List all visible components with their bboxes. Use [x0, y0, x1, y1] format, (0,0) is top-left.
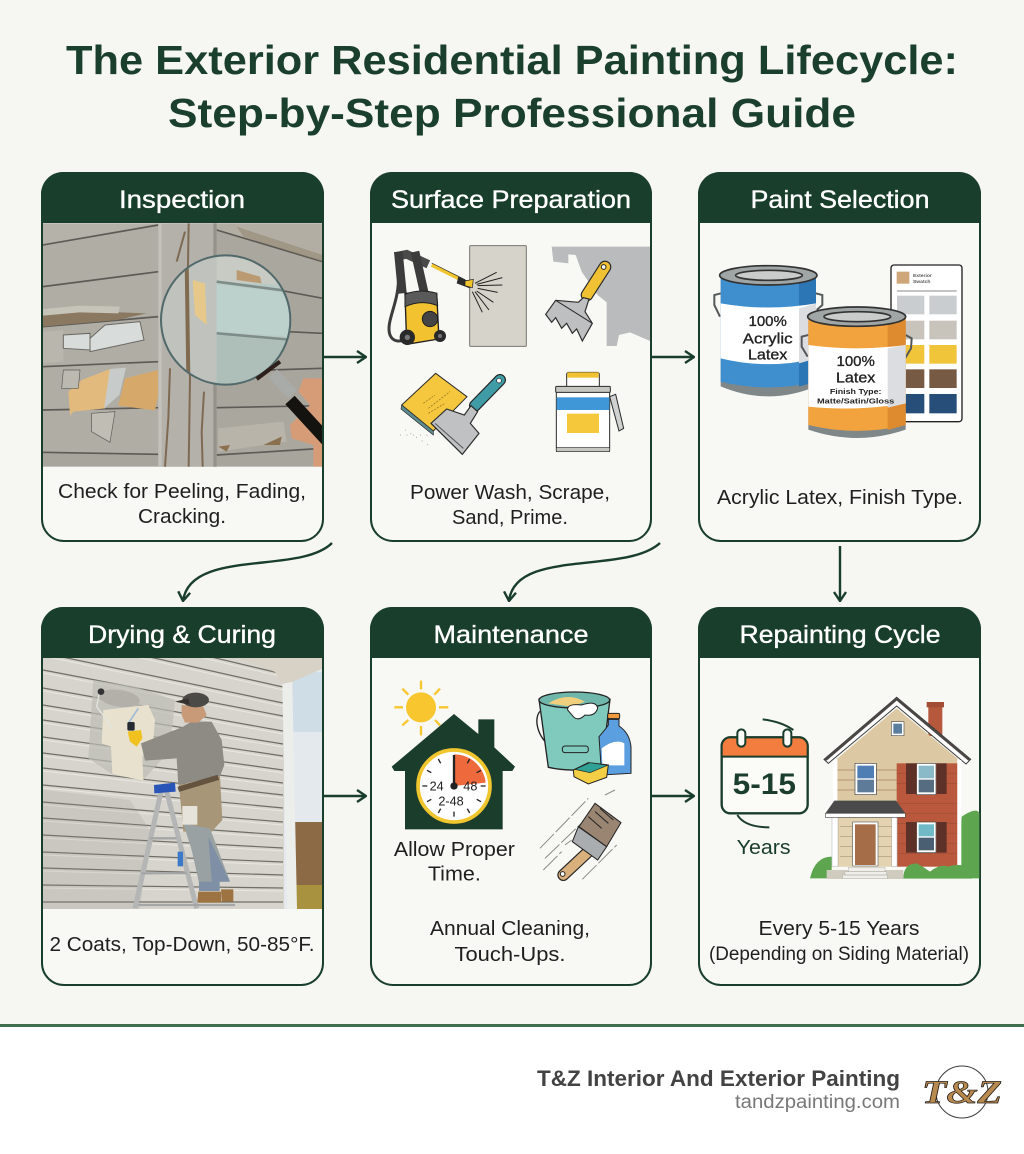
panel: inspection	[41, 172, 327, 541]
photo: peeling siding under magnifying glass	[43, 223, 327, 467]
painter	[141, 693, 233, 903]
logo: T&Z	[922, 1066, 1002, 1118]
title: The Exterior Residential Painting Lifecycle:	[66, 37, 958, 83]
panel: repainting cycle	[698, 607, 981, 985]
caption: repainting cycle: (Depending on Siding Material)	[709, 944, 969, 965]
swatch card	[891, 265, 962, 422]
icon: scraper on wall	[546, 247, 650, 346]
can: 100% latex: Latex	[836, 370, 876, 387]
icon: house with drying clock: 48	[463, 780, 477, 794]
can: 100% latex	[802, 307, 912, 438]
caption: paint selection: Acrylic Latex, Finish Type.	[717, 486, 963, 509]
icon: pressure washer and wall	[389, 246, 526, 346]
caption: repainting cycle: Every 5-15 Years	[758, 918, 920, 940]
icon group: paint cans and swatches	[714, 265, 962, 438]
arrow: maintenance to repainting cycle	[652, 795, 694, 797]
heading: inspection: Inspection	[119, 186, 245, 214]
panel: drying and curing	[41, 600, 324, 985]
can: 100% acrylic latex: Latex	[748, 347, 788, 364]
caption in icon: allow proper time	[394, 838, 515, 886]
caption: maintenance: Annual Cleaning,	[430, 917, 590, 940]
icon group: calendar and house	[722, 697, 979, 879]
heading: surface preparation: Surface Preparation	[391, 186, 631, 214]
heading: maintenance: Maintenance	[434, 621, 588, 649]
icon: calendar 5-15 years: 5-15	[733, 768, 796, 801]
swatch card: Swatch	[913, 279, 930, 285]
arrow: paint selection down to repainting cycle	[839, 546, 841, 601]
heading: repainting cycle: Repainting Cycle	[740, 621, 940, 649]
title: Step-by-Step Professional Guide	[168, 90, 856, 136]
caption: surface preparation	[410, 481, 610, 529]
swatch card: Exterior	[913, 273, 932, 279]
caption: surface preparation: Power Wash, Scrape,	[410, 481, 610, 504]
footer	[0, 1024, 1024, 1154]
magnifier handle and hand	[257, 362, 327, 467]
arrow: inspection down to drying and curing	[183, 543, 332, 601]
painted patch and roller	[88, 680, 175, 781]
caption: maintenance	[430, 917, 590, 966]
caption in icon: allow proper time: Allow Proper	[394, 838, 515, 861]
icon: primer can	[556, 372, 624, 452]
photo: painter on ladder rolling siding	[43, 658, 322, 909]
caption: inspection	[58, 480, 306, 528]
caption: repainting cycle	[709, 918, 969, 965]
heading: paint selection: Paint Selection	[750, 186, 930, 214]
panel: surface preparation	[370, 172, 652, 541]
icon: house with drying clock	[392, 714, 515, 829]
icon: sanding block and putty knife	[400, 373, 501, 454]
icon: calendar 5-15 years: Years	[737, 836, 791, 859]
caption: inspection: Check for Peeling, Fading,	[58, 480, 306, 503]
shadow on wall	[43, 790, 150, 909]
arrow: surface preparation to paint selection	[652, 356, 694, 358]
can: 100% latex: Matte/Satin/Gloss	[817, 397, 894, 406]
footer website: tandzpainting.com	[735, 1092, 900, 1113]
arrow: surface preparation down to maintenance	[509, 543, 660, 601]
caption: drying and curing: 2 Coats, Top-Down, 50-85°F.	[50, 934, 314, 956]
logo: T&Z: T&Z	[922, 1075, 1002, 1111]
icon: two-storey house	[810, 697, 979, 879]
arrow: inspection to surface preparation	[324, 356, 366, 358]
icon: paint brush with motion lines	[540, 790, 621, 879]
panel: maintenance	[370, 607, 652, 985]
icon: cleaning bucket, bottle and sponge	[537, 692, 631, 784]
can: 100% acrylic latex: Acrylic	[743, 330, 793, 347]
panel: paint selection	[698, 172, 981, 541]
icon group: maintenance	[392, 681, 631, 886]
footer company name: T&Z Interior And Exterior Painting	[537, 1066, 900, 1091]
icon: house with drying clock: 24	[430, 780, 444, 794]
heading: drying and curing: Drying & Curing	[88, 621, 276, 649]
can: 100% acrylic latex: 100%	[748, 313, 787, 330]
icon: house with drying clock: 2-48	[438, 794, 464, 808]
icon: sun	[394, 681, 448, 735]
magnifying glass lens	[160, 255, 293, 388]
caption in icon: allow proper time: Time.	[428, 863, 481, 886]
ladder	[135, 783, 235, 908]
caption: surface preparation: Sand, Prime.	[452, 506, 568, 529]
icon group: prep tools	[389, 246, 650, 454]
can: 100% latex: Finish Type:	[830, 387, 881, 396]
can: 100% acrylic latex	[714, 266, 822, 396]
can: 100% latex: 100%	[836, 353, 875, 370]
icon: calendar 5-15 years	[722, 719, 808, 859]
caption: inspection: Cracking.	[138, 505, 226, 528]
sky and trees	[284, 669, 322, 909]
caption: maintenance: Touch-Ups.	[454, 943, 566, 966]
title	[66, 37, 958, 136]
arrow: drying and curing to maintenance	[324, 795, 366, 797]
